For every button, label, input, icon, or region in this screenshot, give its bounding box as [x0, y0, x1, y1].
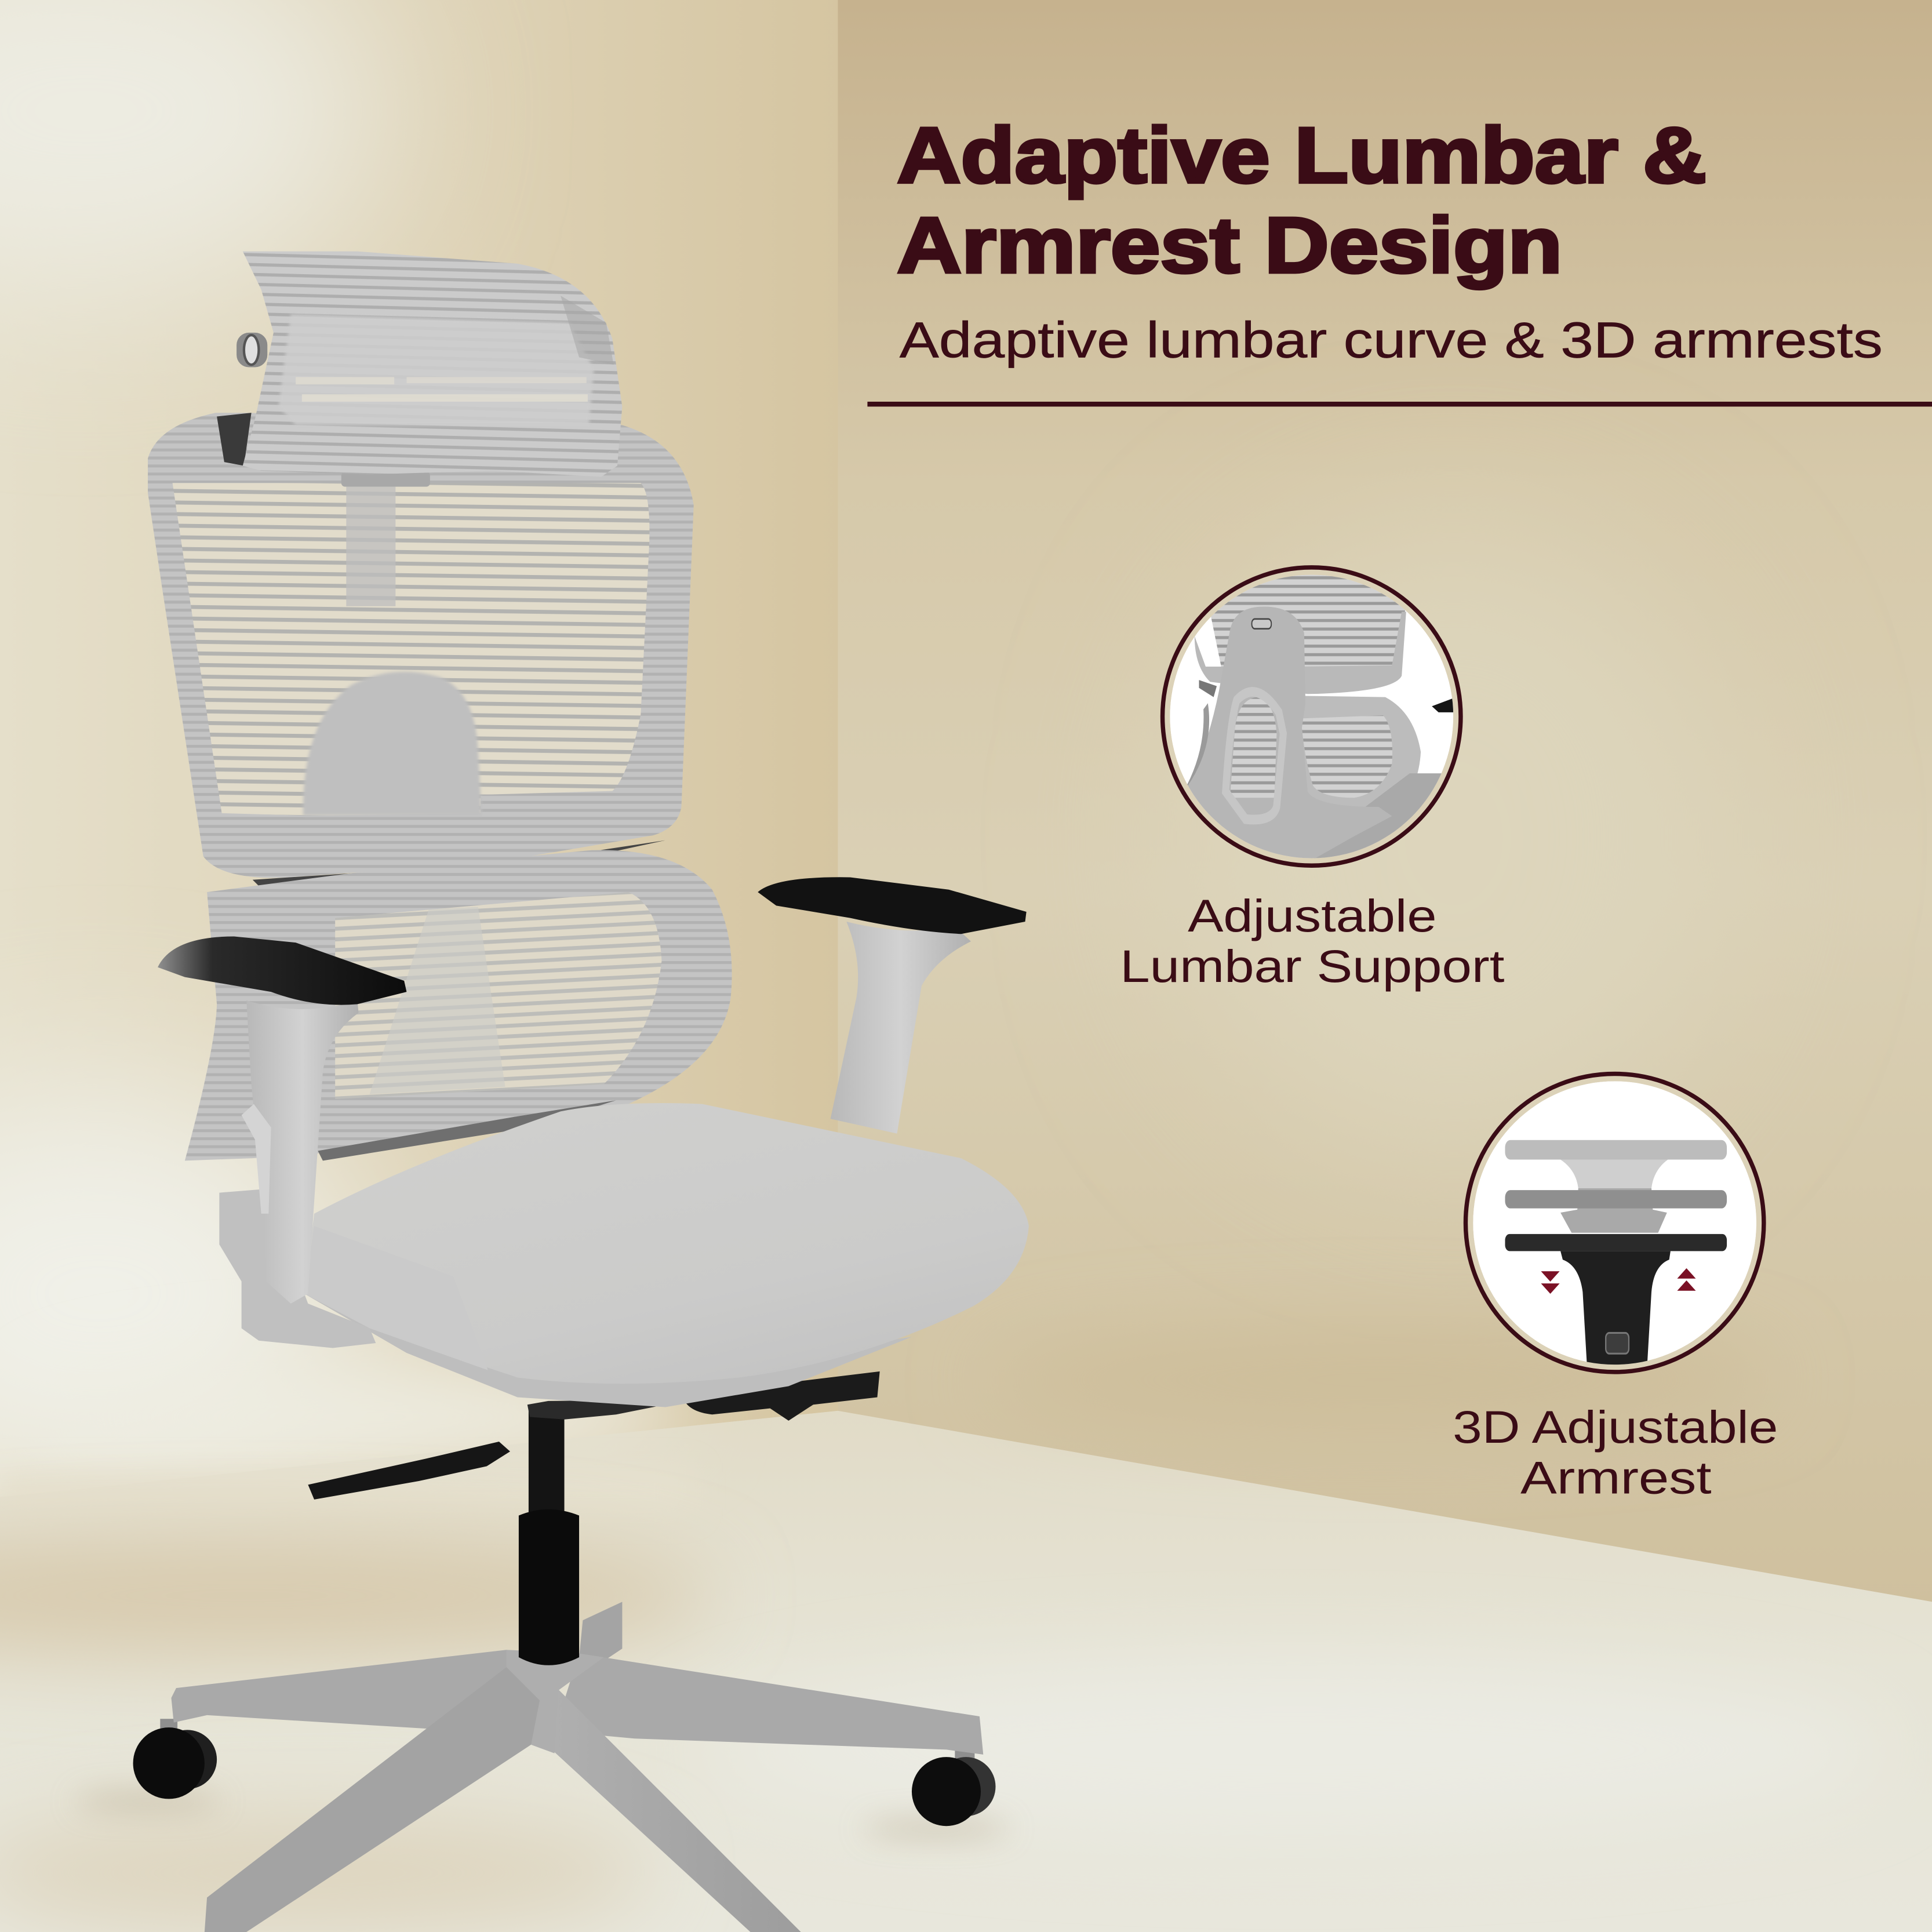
callout: 3D armrest	[1453, 1074, 1778, 1503]
star base	[171, 1650, 983, 1932]
armrest detail photo	[1473, 1081, 1756, 1368]
title: Adaptive Lumbar &	[897, 111, 1707, 199]
label	[1453, 1402, 1778, 1503]
title: Armrest Design	[897, 201, 1562, 289]
arm clip	[242, 1104, 271, 1214]
subtitle: Adaptive lumbar curve & 3D armrests	[900, 312, 1883, 368]
label	[1120, 890, 1505, 992]
right lever	[684, 1371, 880, 1421]
lower backrest	[185, 850, 732, 1160]
star base back leg	[579, 1602, 622, 1661]
circle frame	[1465, 1074, 1764, 1372]
left arm pad	[158, 936, 406, 1005]
label: Lumbar Support	[1120, 941, 1505, 992]
caster right	[912, 1740, 996, 1826]
back gap line	[253, 841, 665, 886]
label: Armrest	[1520, 1452, 1712, 1503]
lumbar pad	[303, 672, 482, 816]
back seat strip	[318, 1100, 616, 1160]
label: 3D Adjustable	[1453, 1402, 1778, 1453]
right arm post	[831, 922, 971, 1134]
under seat bracket	[527, 1400, 690, 1420]
callout: lumbar support	[1120, 567, 1505, 992]
arm base block	[219, 1189, 376, 1348]
up arrows	[1677, 1268, 1696, 1291]
left arm post	[246, 1000, 359, 1304]
label: Adjustable	[1188, 890, 1436, 941]
right arm pad	[758, 877, 1027, 934]
spine bar	[346, 487, 395, 606]
gas lift column	[519, 1405, 579, 1665]
bracket	[341, 472, 430, 487]
seat side panel	[304, 1226, 488, 1370]
circle frame	[1163, 567, 1461, 865]
left lever	[308, 1442, 510, 1500]
heading divider	[867, 402, 1932, 406]
caster shadows	[74, 1793, 1010, 1837]
seat underside shell	[304, 1294, 912, 1407]
down arrows	[1541, 1271, 1560, 1294]
seat cushion	[304, 1103, 1029, 1407]
caster left	[133, 1719, 217, 1799]
backrest mesh window	[173, 483, 649, 816]
upper backrest	[148, 413, 694, 878]
knob	[237, 333, 267, 367]
lumbar detail photo	[1170, 569, 1456, 868]
dark corner	[217, 413, 252, 465]
lower mesh window	[335, 892, 661, 1099]
title	[897, 111, 1707, 289]
headrest	[237, 252, 622, 477]
office chair	[74, 252, 1029, 1932]
